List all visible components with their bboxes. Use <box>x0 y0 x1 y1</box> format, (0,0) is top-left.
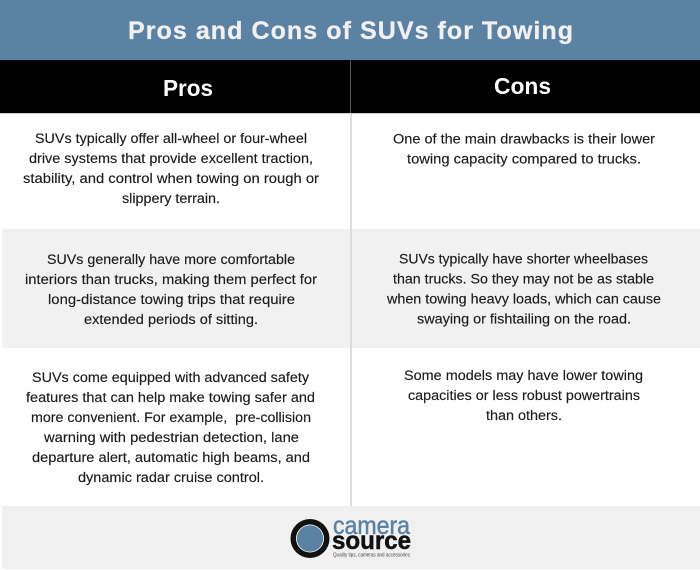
cons row 1 text: towing capacity compared to trucks. <box>407 152 641 166</box>
pros row 1 text: drive systems that provide excellent traction, <box>29 151 313 166</box>
pros row 1 text: stability, and control when towing on rough or <box>23 171 320 186</box>
pros row 2 text: extended periods of sitting. <box>84 312 258 327</box>
pros row 2 text <box>25 252 318 327</box>
pros row 2 text: SUVs generally have more comfortable <box>47 252 295 267</box>
pros row 2 text: interiors than trucks, making them perfect for <box>25 272 318 287</box>
footer band <box>2 506 700 569</box>
pros row 2 text: long-distance towing trips that require <box>48 292 295 307</box>
cons row 1 text <box>393 132 656 166</box>
title banner: Pros and Cons of SUVs for Towing <box>128 17 573 45</box>
cons row 3 text <box>404 368 643 423</box>
cons row 2 text: than trucks. So they may not be as stable <box>393 272 654 286</box>
table header: pros and cons: Pros <box>163 75 213 101</box>
pros row 3 text: dynamic radar cruise control. <box>78 470 264 485</box>
column divider <box>350 114 352 506</box>
logo: camera source: Quality tips, cameras and accessories <box>333 552 410 558</box>
cons row 3 text: capacities or less robust powertrains <box>408 388 640 403</box>
pros row 3 text: warning with pedestrian detection, lane <box>43 430 299 445</box>
pros row 3 text: SUVs come equipped with advanced safety <box>32 370 309 385</box>
table header: pros and cons <box>0 60 700 114</box>
pros row 1 text <box>23 131 320 206</box>
cons row 3 text: Some models may have lower towing <box>404 368 643 383</box>
pros row 3 text <box>26 370 315 485</box>
cons row 2 text: when towing heavy loads, which can cause <box>386 292 661 306</box>
pros row 3 text: departure alert, automatic high beams, and <box>32 450 310 465</box>
title banner <box>0 0 700 60</box>
cons row 2 text: SUVs typically have shorter wheelbases <box>399 252 648 266</box>
logo: camera source: camera <box>333 512 410 540</box>
cons row 1 text: One of the main drawbacks is their lower <box>393 132 656 146</box>
cons row 2 text <box>386 252 661 326</box>
cons row 2 text: swaying or fishtailing on the road. <box>417 312 631 326</box>
pros row 1 text: SUVs typically offer all-wheel or four-wheel <box>35 131 307 146</box>
pros row 3 text: more convenient. For example, pre-collision <box>31 410 311 425</box>
cons row 3 text: than others. <box>486 408 562 423</box>
table header: pros and cons: Cons <box>494 73 551 99</box>
shaded middle row <box>2 229 700 348</box>
logo: camera source: source <box>332 527 411 555</box>
pros row 1 text: slippery terrain. <box>122 191 220 206</box>
logo: camera source <box>290 512 411 558</box>
icon: camera lens <box>290 519 330 558</box>
pros row 3 text: features that can help make towing safer and <box>26 390 315 405</box>
